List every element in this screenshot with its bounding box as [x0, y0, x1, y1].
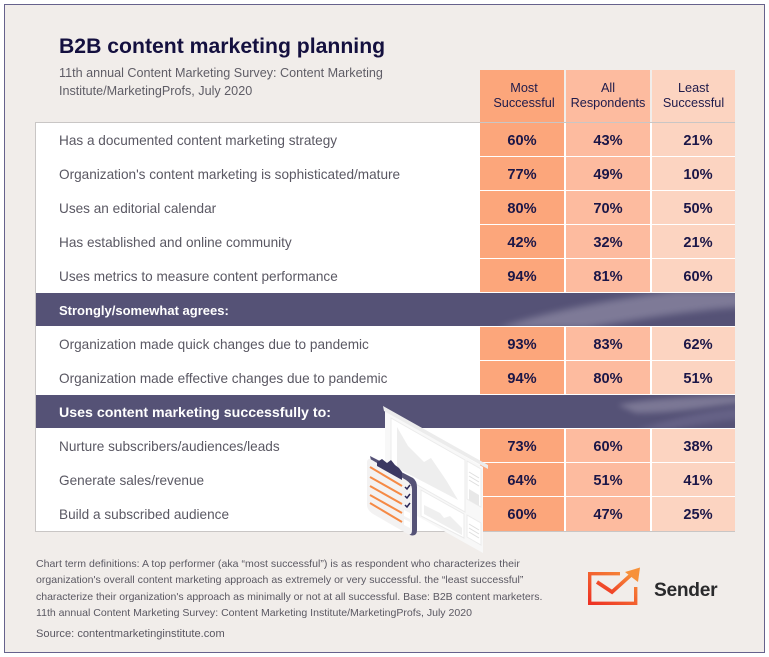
value: 60% — [507, 507, 537, 523]
value: 94% — [507, 371, 537, 387]
row label: documented strategy: Has a documented content marketing strategy — [59, 133, 337, 148]
footnote: Chart term definitions: A top performer (aka “most successful”) is as respondent who characterizes their — [36, 558, 520, 570]
footnote: characterize their organization's approach as minimally or not at all successful. Base: B2B content marketers. — [36, 591, 542, 603]
subtitle: 11th annual Content Marketing Survey: Content Marketing — [59, 66, 383, 80]
column header: All Respondents — [566, 70, 650, 122]
value: 47% — [593, 507, 623, 523]
value: 21% — [683, 133, 713, 149]
column header: Most Successful: Most — [510, 81, 538, 95]
section band: uses content marketing: Uses content marketing successfully to: — [59, 405, 331, 421]
section band: strongly agrees — [36, 293, 735, 326]
value — [652, 259, 735, 292]
value — [566, 157, 650, 190]
column header: All Respondents: All — [601, 81, 615, 95]
subtitle — [59, 66, 383, 98]
footnote: 11th annual Content Marketing Survey: Content Marketing Institute/MarketingProfs, July 2020 — [36, 607, 472, 619]
footnote — [36, 558, 542, 619]
value: 60% — [507, 133, 537, 149]
title: B2B content marketing planning — [59, 35, 385, 58]
row label: quick changes: Organization made quick changes due to pandemic — [59, 337, 369, 352]
value — [652, 463, 735, 496]
icon: dashboard board — [383, 406, 488, 553]
value — [566, 259, 650, 292]
value — [480, 259, 564, 292]
value — [652, 327, 735, 360]
column header: Most Successful — [480, 70, 564, 122]
section band: uses content marketing — [36, 395, 735, 428]
value — [566, 497, 650, 531]
source: Source: contentmarketinginstitute.com — [36, 628, 225, 640]
value: 93% — [507, 337, 537, 353]
value: 80% — [593, 371, 623, 387]
value — [480, 157, 564, 190]
value: 51% — [683, 371, 713, 387]
value: 50% — [683, 201, 713, 217]
value: 21% — [683, 235, 713, 251]
row label: editorial calendar: Uses an editorial calendar — [59, 201, 216, 216]
column header: Least Successful: Successful — [663, 96, 724, 110]
value — [652, 157, 735, 190]
logo: Sender — [588, 568, 718, 605]
column header: All Respondents: Respondents — [571, 96, 645, 110]
footnote: organization's overall content marketing approach as extremely or very successful. the “least successful” — [36, 574, 523, 586]
illustration: dashboard screen and checklist — [367, 406, 488, 553]
value — [652, 123, 735, 156]
column header: Most Successful: Successful — [493, 96, 555, 110]
table white panel — [35, 122, 735, 532]
row label: online community: Has established and online community — [59, 235, 292, 250]
value — [480, 225, 564, 258]
subtitle: Institute/MarketingProfs, July 2020 — [59, 84, 252, 98]
value — [652, 361, 735, 394]
value: 42% — [507, 235, 537, 251]
value: 80% — [507, 201, 537, 217]
icon: envelope with arrow — [588, 568, 640, 605]
value — [652, 191, 735, 224]
row label: subscribed audience: Build a subscribed audience — [59, 507, 229, 522]
value: 62% — [683, 337, 713, 353]
value — [652, 429, 735, 462]
row label: metrics: Uses metrics to measure content performance — [59, 269, 338, 284]
value: 41% — [683, 473, 713, 489]
value — [566, 463, 650, 496]
value — [566, 361, 650, 394]
value — [480, 327, 564, 360]
value — [566, 123, 650, 156]
value — [566, 191, 650, 224]
row label: sophisticated: Organization's content marketing is sophisticated/mature — [59, 167, 400, 182]
value: 60% — [593, 439, 623, 455]
row label: nurture: Nurture subscribers/audiences/leads — [59, 439, 280, 454]
value — [480, 123, 564, 156]
row label: effective changes: Organization made effective changes due to pandemic — [59, 371, 387, 386]
value — [480, 361, 564, 394]
value — [566, 225, 650, 258]
value: 43% — [593, 133, 623, 149]
logo wordmark: Sender — [654, 580, 717, 601]
value: 64% — [507, 473, 537, 489]
section band: strongly agrees: Strongly/somewhat agrees: — [59, 303, 229, 318]
value — [566, 429, 650, 462]
value: 25% — [683, 507, 713, 523]
column header: Least Successful — [652, 70, 735, 122]
value — [652, 225, 735, 258]
value: 49% — [593, 167, 623, 183]
value — [480, 429, 564, 462]
value: 94% — [507, 269, 537, 285]
value: 73% — [507, 439, 537, 455]
value — [480, 191, 564, 224]
value: 32% — [593, 235, 623, 251]
column header: Least Successful: Least — [678, 81, 709, 95]
row label: sales: Generate sales/revenue — [59, 473, 204, 488]
value — [480, 463, 564, 496]
value — [480, 497, 564, 531]
value — [652, 497, 735, 531]
value: 70% — [593, 201, 623, 217]
value: 51% — [593, 473, 623, 489]
icon: clipboard checklist — [367, 456, 417, 535]
value: 83% — [593, 337, 623, 353]
value: 10% — [683, 167, 713, 183]
value: 81% — [593, 269, 623, 285]
value: 77% — [507, 167, 537, 183]
value: 60% — [683, 269, 713, 285]
value: 38% — [683, 439, 713, 455]
value — [566, 327, 650, 360]
